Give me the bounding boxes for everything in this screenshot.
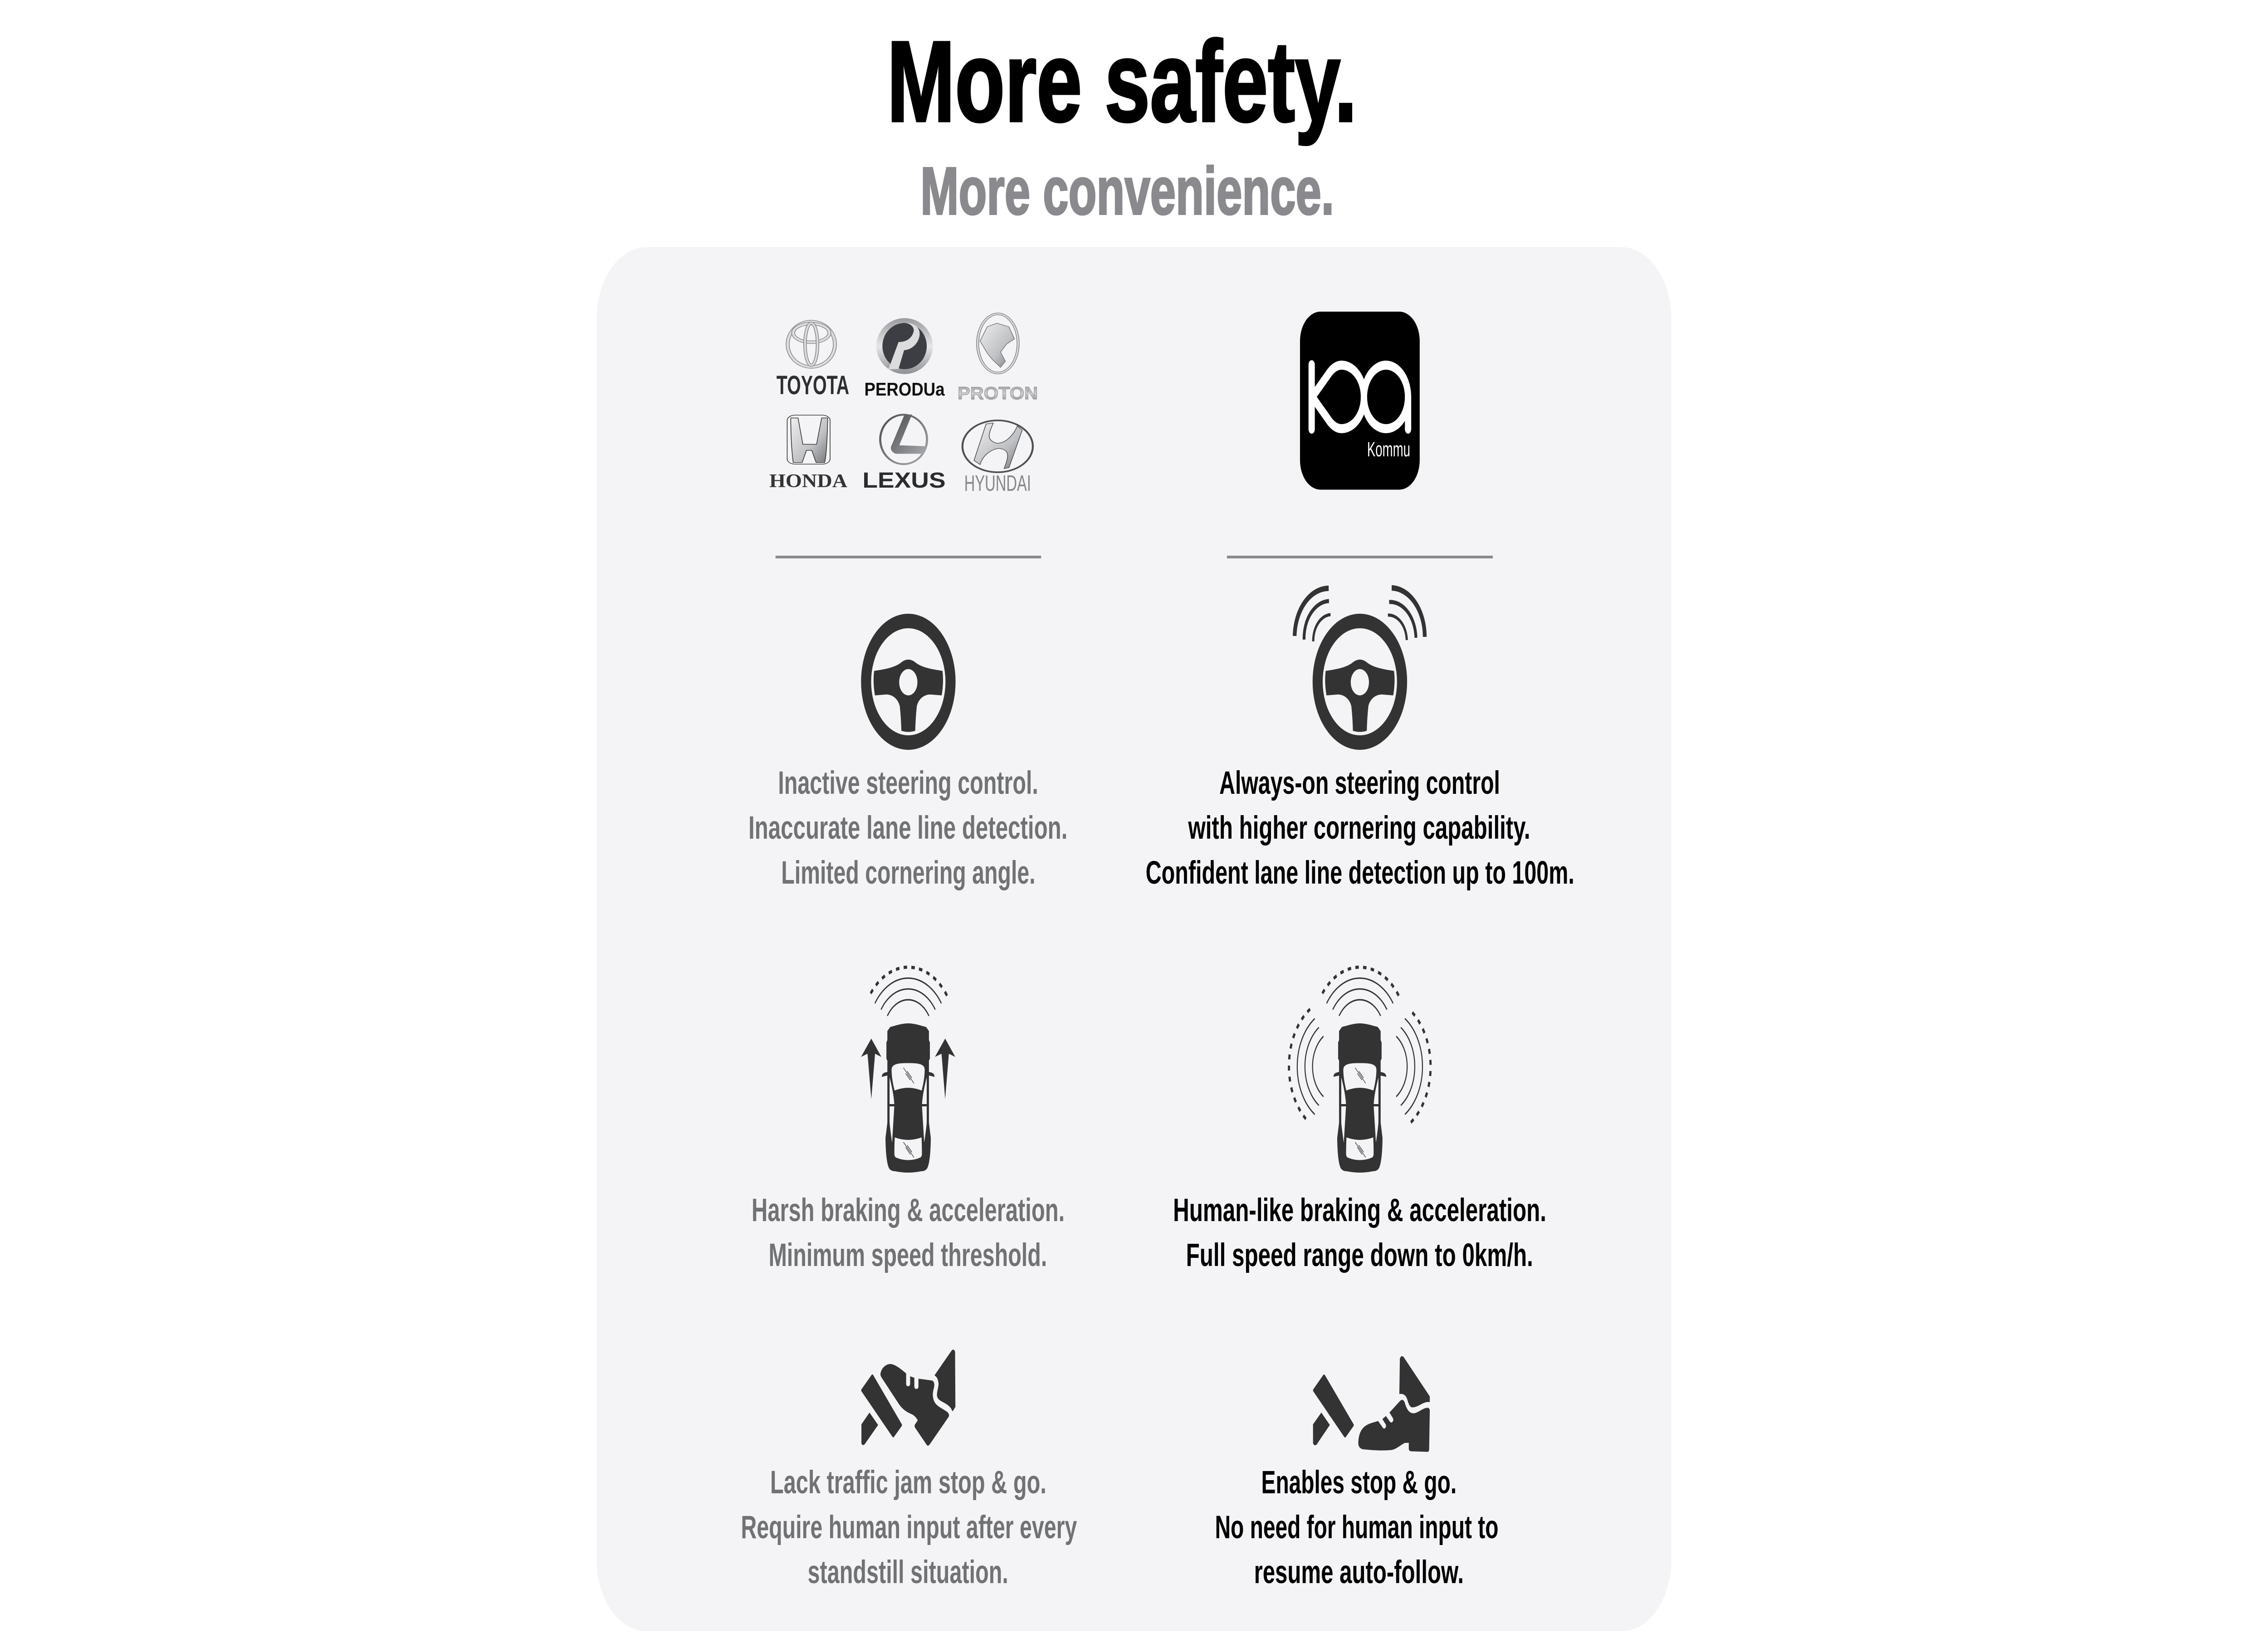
text: stock stop and go limits: Require human input after every — [741, 1509, 1077, 1545]
title: More safety. — [887, 18, 1357, 146]
text: Kommu braking benefits — [1173, 1192, 1546, 1273]
text: stock stop and go limits: standstill situation. — [808, 1554, 1008, 1590]
logo text: Proton: PROTON — [958, 384, 1038, 403]
icon: foot pressing pedal — [861, 1349, 955, 1446]
text: stock braking limits: Harsh braking & acceleration. — [752, 1192, 1065, 1228]
logo: Perodua emblem — [876, 318, 933, 374]
text: Kommu steering benefits — [1146, 765, 1574, 890]
logo text: Perodua: PERODUa — [865, 379, 945, 400]
text: Kommu stop and go benefits: No need for human input to — [1215, 1509, 1498, 1545]
logo: Hyundai emblem — [963, 420, 1033, 472]
icon: car with front radar and arrows — [861, 967, 955, 1173]
text: stock steering limits: Inaccurate lane line detection. — [748, 810, 1067, 846]
logos: supported car brands — [769, 314, 1038, 495]
text: Kommu steering benefits: Confident lane line detection up to 100m. — [1146, 855, 1574, 890]
logo: Kommu app icon — [1300, 312, 1420, 490]
text: Kommu steering benefits: with higher cornering capability. — [1188, 810, 1530, 846]
icon: steering wheel with active signal arcs — [1295, 588, 1425, 743]
logo text: Toyota: TOYOTA — [777, 371, 849, 400]
icon: car with all-around radar — [1289, 967, 1431, 1173]
text: stock stop and go limits — [741, 1464, 1077, 1590]
logo: Toyota emblem — [787, 322, 835, 367]
logo text: Hyundai: HYUNDAI — [964, 471, 1031, 495]
text: Kommu steering benefits: Always-on steering control — [1219, 765, 1500, 801]
logo text: Lexus: LEXUS — [862, 468, 946, 492]
text: Kommu stop and go benefits: resume auto-follow. — [1254, 1554, 1464, 1590]
text: stock braking limits: Minimum speed threshold. — [768, 1237, 1047, 1273]
text: Kommu stop and go benefits: Enables stop & go. — [1261, 1464, 1457, 1500]
text: stock stop and go limits: Lack traffic jam stop & go. — [770, 1464, 1046, 1500]
text: stock braking limits — [752, 1192, 1065, 1273]
logo: Kommu app icon: Kommu — [1367, 439, 1410, 461]
text: stock steering limits — [748, 765, 1067, 890]
text: Kommu stop and go benefits — [1215, 1464, 1498, 1590]
logo: Lexus emblem — [880, 414, 927, 464]
panel: comparison — [596, 247, 1672, 1631]
logo: Proton emblem — [978, 314, 1018, 373]
text: Kommu braking benefits: Human-like braking & acceleration. — [1173, 1192, 1546, 1228]
subtitle: More convenience. — [920, 153, 1334, 228]
icon: steering wheel — [866, 621, 950, 743]
icon: foot off pedal — [1313, 1356, 1430, 1452]
text: Kommu braking benefits: Full speed range down to 0km/h. — [1186, 1237, 1533, 1273]
logo: Honda emblem — [787, 415, 830, 464]
logo text: Honda: HONDA — [769, 470, 847, 491]
text: stock steering limits: Limited cornering angle. — [781, 855, 1036, 890]
text: stock steering limits: Inactive steering control. — [778, 765, 1038, 801]
